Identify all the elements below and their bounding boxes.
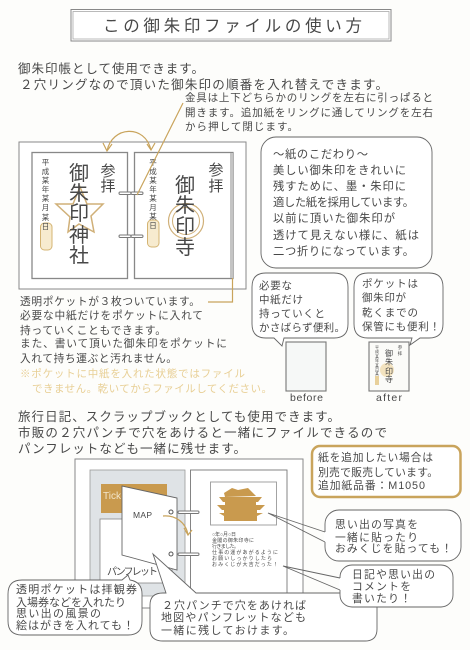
travel diary text [18, 409, 387, 456]
title [71, 10, 391, 41]
pamphlet: パンフレット [107, 566, 158, 578]
pocket text: 必要な中紙だけをポケットに入れて [20, 309, 203, 322]
photo callout: 一緒に貼ったり [335, 530, 418, 544]
paper quality callout: 残すために、墨・朱印に [273, 179, 406, 193]
map sheet: MAP [133, 510, 152, 520]
travel diary text: 市販の２穴パンチで穴をあけると一緒にファイルできるので [18, 426, 387, 440]
diary comment: 行きました。 [212, 543, 239, 550]
punch holes callout: 地図やパンフレットなども [161, 611, 306, 624]
before: blank paper [286, 342, 326, 404]
intro text: ２穴リングなので頂いた御朱印の順番を入れ替えできます。 [20, 77, 388, 92]
pocket callout: 絵はがきを入れても！ [16, 618, 134, 632]
pocket text [20, 295, 227, 365]
after callout: 御朱印が [362, 291, 406, 304]
map sheet [122, 486, 177, 570]
paper quality callout: 適した紙を採用しています。 [273, 195, 414, 209]
intro text [18, 61, 388, 92]
ring instructions note: から押して閉じます。 [185, 120, 298, 133]
after callout: 乾くまでの [362, 306, 418, 319]
right page: 御朱印寺 [175, 174, 195, 259]
ring instructions note: 金具は上下どちらかのリングを左右に引っぱると [185, 91, 433, 104]
before: blank paper: before [290, 392, 323, 404]
ring instructions note: 開きます。追加紙をリングに通してリングを左右 [185, 106, 433, 119]
after callout: ポケットは [362, 278, 418, 290]
diary comment: 仕事の運があがるように [212, 549, 278, 556]
ticket: Ticket [103, 491, 130, 502]
additional paper box: 紙を追加したい場合は [318, 450, 433, 464]
left pocket page [90, 470, 185, 596]
diary comment: 金閣の御朱印寺に [212, 537, 254, 544]
after: stamped paper: after [376, 392, 402, 404]
pocket warning: ※ポケットに中紙を入れた状態ではファイル [20, 367, 245, 380]
left page [32, 152, 128, 278]
after: stamped paper: 御朱印寺 [385, 348, 393, 384]
before callout: 中紙だけ [259, 293, 303, 306]
right page: 平成某年某月某日 [149, 158, 157, 230]
pocket text: 持っていくこともできます。 [20, 324, 166, 337]
rings [178, 511, 199, 556]
paper quality callout: 二つ折りになっています。 [273, 244, 414, 258]
pocket text: 入れて持ち運ぶと汚れません。 [20, 352, 177, 365]
scrapbook illustration [75, 459, 303, 608]
pocket callout: 透明ポケットは拝観券 [16, 582, 137, 596]
right diary page [190, 470, 287, 605]
pocket text: 透明ポケットが３枚ついています。 [20, 295, 200, 308]
after callout [354, 273, 443, 345]
paper quality callout: 透けて見えない様に、紙は [273, 228, 419, 242]
before callout: かさばらず便利。 [259, 321, 345, 334]
after: stamped paper: 参拝 [398, 344, 403, 357]
right page [134, 152, 233, 278]
punch holes callout [150, 554, 377, 641]
diary comment: ○年○月○日 [212, 531, 236, 538]
connector: binder to pocket text [208, 278, 232, 302]
diary comment [212, 531, 278, 568]
diary comment: お願いしっかりしたら [212, 555, 272, 562]
paper quality callout: 以前に頂いた御朱印が [273, 211, 395, 225]
left page: 参拝 [100, 163, 116, 195]
paper quality callout: 美しい御朱印をきれいに [273, 163, 406, 177]
left page: 御朱印神社 [69, 162, 89, 267]
leader line: ring note [137, 103, 183, 195]
photo callout: 思い出の写真を [335, 517, 418, 531]
additional paper box [312, 446, 460, 497]
pocket callout [8, 575, 142, 635]
after: stamped paper [369, 342, 409, 404]
punch holes callout: 一緒に残しておけます。 [161, 623, 294, 637]
right page: 参拝 [208, 162, 224, 195]
punch holes callout: ２穴パンチで穴をあければ [162, 599, 306, 612]
after callout: 保管にも便利！ [362, 320, 440, 333]
pocket warning [20, 367, 272, 395]
ring instructions note [185, 91, 433, 133]
arrow: page swap [103, 131, 155, 151]
paper quality callout [261, 137, 432, 268]
diary callout: 日記や思い出の [352, 568, 435, 581]
diary callout: 書いたり！ [352, 591, 411, 605]
intro text: 御朱印帳として使用できます。 [18, 61, 204, 76]
arrow: map to page [163, 516, 192, 535]
before callout [252, 273, 348, 346]
before callout: 必要な [259, 279, 292, 292]
after: stamped paper: 平成某年某月某日 [375, 345, 379, 381]
left page: 平成某年某月某日 [42, 158, 50, 231]
travel diary text: 旅行日記、スクラップブックとしても使用できます。 [18, 409, 340, 424]
pocket callout: 思い出の風景の [16, 607, 101, 620]
pocket warning: できません。乾いてからファイルしてください。 [32, 382, 272, 395]
title: この御朱印ファイルの使い方 [103, 16, 362, 36]
diary comment: おみくじが大吉だった！ [212, 561, 278, 568]
rings [119, 192, 143, 238]
before callout: 持っていくと [259, 307, 325, 320]
travel diary text: パンフレットなども一緒に残せます。 [18, 442, 246, 456]
icon: temple [217, 488, 265, 521]
pocket callout: 入場券などを入れたり [16, 595, 126, 609]
photo callout: おみくじを貼っても！ [335, 541, 452, 555]
diary callout [283, 565, 453, 607]
paper quality callout: ～紙のこだわり～ [273, 147, 368, 161]
pocket text: また、書いて頂いた御朱印をポケットに [20, 337, 227, 350]
additional paper box: 追加紙品番：M1050 [318, 478, 425, 492]
photo callout [268, 510, 461, 561]
additional paper box: 別売で販売しています。 [318, 466, 438, 479]
binder illustration [19, 142, 246, 289]
diary callout: コメントを [352, 580, 411, 593]
